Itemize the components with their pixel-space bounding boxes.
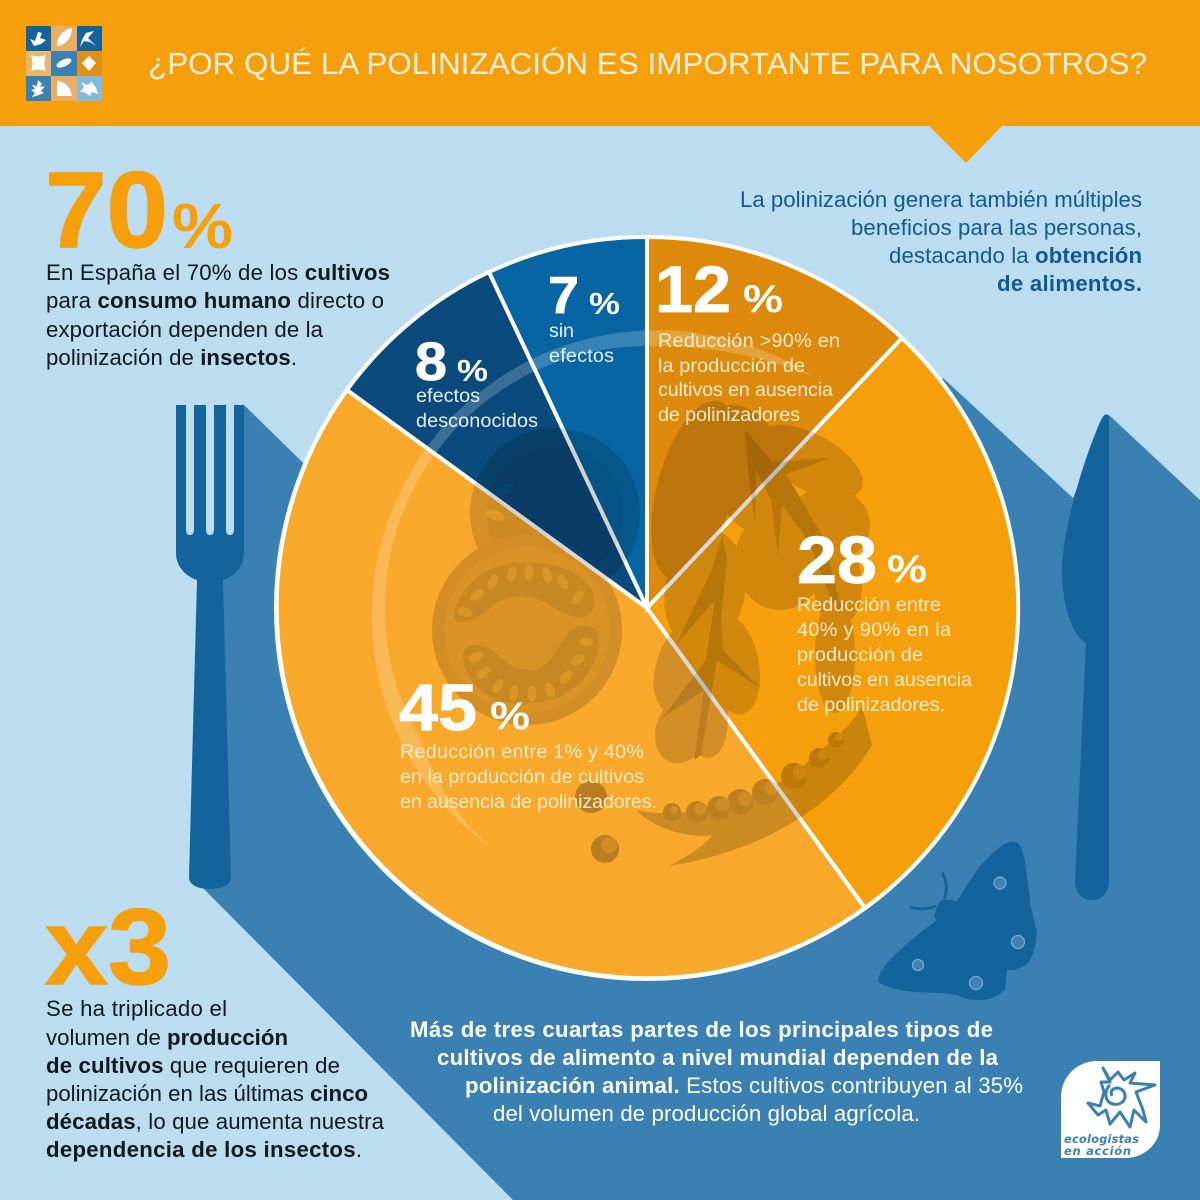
label: 28%: de polinizadores. xyxy=(797,694,945,716)
stat: 70%: 70 xyxy=(45,149,168,270)
text block: global crops: Más de tres cuartas partes de los principales tipos de xyxy=(410,1017,993,1042)
label: 28%: % xyxy=(887,548,927,591)
icon: ecologistas en acción logo: en acción xyxy=(1064,1144,1131,1158)
text block: benefits intro: destacando la obtención xyxy=(889,243,1142,268)
icon: moth silhouette xyxy=(878,842,1037,1000)
label: 7%: sin xyxy=(549,320,574,342)
text block: 70% description: exportación dependen de la xyxy=(46,317,324,342)
icon: fork xyxy=(176,405,244,889)
text block: global crops: cultivos de alimento a nivel mundial dependen de la xyxy=(437,1045,999,1070)
label: 28%: cultivos en ausencia xyxy=(797,669,972,691)
label: 45%: % xyxy=(490,695,530,738)
label: 8% xyxy=(415,332,538,432)
icon: pea pod xyxy=(636,706,872,866)
header banner xyxy=(0,0,1200,163)
label: 8%: % xyxy=(457,353,488,388)
text block: 70% description: En España el 70% de los cultivos xyxy=(46,260,390,285)
text block: benefits intro: La polinización genera también múltiples xyxy=(740,187,1142,212)
label: 28%: producción de xyxy=(797,644,923,666)
segment: 45% xyxy=(277,390,865,978)
segment: 7% xyxy=(489,237,647,608)
text block: x3 description xyxy=(46,996,385,1162)
segment: 28% xyxy=(647,338,1018,908)
text block: 70% description: para consumo humano directo o xyxy=(46,288,384,313)
label: 28%: Reducción entre xyxy=(797,594,941,616)
icon: loose peas xyxy=(575,781,619,863)
icon: tomato slice back xyxy=(470,428,640,598)
label: 28%: 28 xyxy=(797,523,877,598)
label: 7%: efectos xyxy=(549,345,614,367)
label: 8%: efectos xyxy=(416,385,480,407)
text block: global crops xyxy=(410,1017,1023,1126)
plate highlight xyxy=(372,330,814,847)
label: 28%: 40% y 90% en la xyxy=(797,619,951,641)
stat: 70% xyxy=(45,149,390,370)
text block: x3 description: volumen de producción xyxy=(46,1025,288,1050)
text block: benefits intro: beneficios para las personas, xyxy=(851,215,1142,240)
illustration: vegetables on plate xyxy=(432,391,874,866)
label: 7%: 7 xyxy=(548,267,579,325)
label: 45%: en la producción de cultivos xyxy=(400,766,644,788)
icon: knife xyxy=(1062,414,1109,900)
chart: pie plate xyxy=(274,235,1020,981)
icon: ecologistas en acción logo: ecologistas xyxy=(1064,1132,1139,1146)
label: 12%: de polinizadores xyxy=(658,404,800,426)
label: 12%: cultivos en ausencia xyxy=(658,379,833,401)
segment: 12% xyxy=(647,237,902,608)
label: 12% xyxy=(655,252,840,426)
stat: 70%: % xyxy=(172,190,233,262)
label: 12%: % xyxy=(743,278,783,321)
label: 45%: en ausencia de polinizadores. xyxy=(400,791,657,813)
label: 8%: 8 xyxy=(415,332,447,392)
plate and cutlery drop shadow xyxy=(195,378,1200,1200)
text block: x3 description: polinización en las últimas cinco xyxy=(46,1081,368,1106)
label: 45% xyxy=(399,670,657,813)
label: 7% xyxy=(548,267,620,367)
label: 28% xyxy=(797,523,972,716)
label: 12%: 12 xyxy=(655,252,731,326)
label: 45%: 45 xyxy=(399,670,477,744)
text block: x3 description: décadas, lo que aumenta nuestra xyxy=(46,1109,385,1134)
stat: x3 xyxy=(45,886,385,1162)
label: 45%: Reducción entre 1% y 40% xyxy=(400,741,644,763)
text block: benefits intro xyxy=(740,187,1142,296)
label: 12%: Reducción >90% en xyxy=(658,330,840,352)
text block: x3 description: Se ha triplicado el xyxy=(46,996,227,1021)
text block: global crops: del volumen de producción global agrícola. xyxy=(493,1101,920,1126)
icon: ecologistas en acción logo xyxy=(1061,1061,1160,1158)
text block: global crops: polinización animal. Estos cultivos contribuyen al 35% xyxy=(465,1073,1023,1098)
text block: x3 description: dependencia de los insectos. xyxy=(46,1137,362,1162)
icon: biodiversity logo grid xyxy=(26,26,102,101)
label: 7%: % xyxy=(589,286,620,321)
stat: x3: x3 xyxy=(45,886,171,1007)
segment: 8% xyxy=(347,272,647,608)
text block: 70% description: polinización de insectos. xyxy=(46,345,297,370)
icon: tomato slice front xyxy=(432,535,622,725)
text block: x3 description: de cultivos que requieren de xyxy=(46,1053,340,1078)
text block: benefits intro: de alimentos. xyxy=(997,271,1142,296)
label: 8%: desconocidos xyxy=(416,410,538,432)
label: 12%: la producción de xyxy=(658,355,805,377)
title: ¿POR QUÉ LA POLINIZACIÓN ES IMPORTANTE PARA NOSOTROS? xyxy=(148,46,1147,81)
text block: 70% description xyxy=(46,260,390,370)
icon: oak leaf branch xyxy=(634,391,874,771)
